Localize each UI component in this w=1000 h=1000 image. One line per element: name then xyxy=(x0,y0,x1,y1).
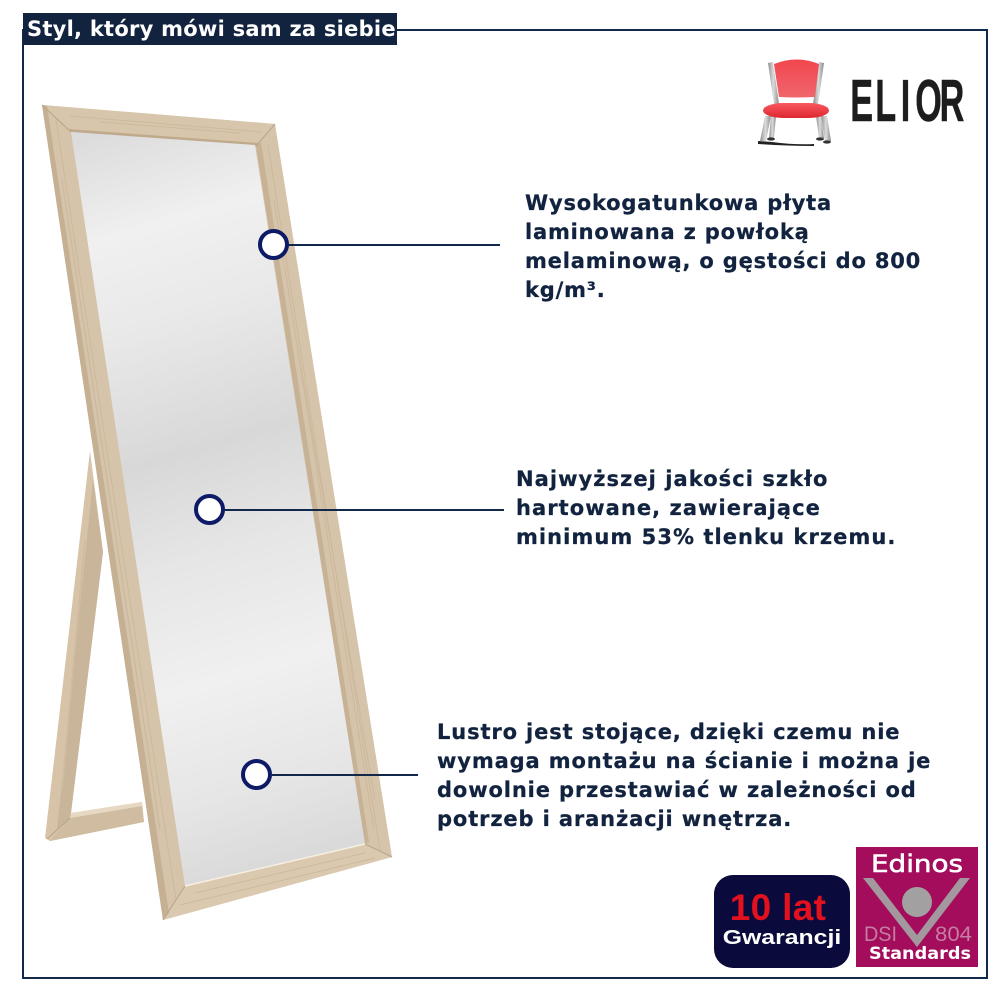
callout text 3 xyxy=(437,720,931,831)
logo wordmark: E xyxy=(850,68,873,134)
callout text 1: melaminową, o gęstości do 800 xyxy=(525,249,921,273)
DSI label: DSI xyxy=(864,923,897,946)
logo wordmark: I xyxy=(901,68,910,134)
badge caption: Gwarancji xyxy=(723,927,841,949)
logo wordmark: L xyxy=(875,68,896,134)
stand leg xyxy=(45,451,144,841)
logo wordmark xyxy=(850,68,964,134)
title: Styl, który mówi sam za siebie xyxy=(27,17,396,41)
callout marker 3 xyxy=(241,759,272,790)
callout text 3: Lustro jest stojące, dzięki czemu nie xyxy=(437,720,900,744)
badge heading: 10 lat xyxy=(730,887,826,928)
callout text 1: laminowana z powłoką xyxy=(525,220,810,244)
callout text 3: dowolnie przestawiać w zależności od xyxy=(437,778,917,802)
callout text 3: potrzeb i aranżacji wnętrza. xyxy=(437,807,792,831)
Standards label: Standards xyxy=(869,944,971,964)
frame shading xyxy=(42,105,169,920)
callout line 2 xyxy=(224,509,504,511)
callout marker 2 xyxy=(194,494,225,525)
logo: Elior xyxy=(758,60,964,146)
callout text 1: kg/m³. xyxy=(525,278,606,302)
callout text 1 xyxy=(525,191,921,302)
804 label: 804 xyxy=(935,923,972,946)
grey circle xyxy=(902,887,932,917)
mirror frame xyxy=(42,105,392,920)
callout text 3: wymaga montażu na ścianie i można je xyxy=(437,749,931,773)
V mark xyxy=(863,878,970,947)
callout text 2: hartowane, zawierające xyxy=(516,496,821,520)
callout text 1: Wysokogatunkowa płyta xyxy=(525,191,832,215)
callout line 3 xyxy=(272,774,418,776)
callout text 2 xyxy=(516,467,896,549)
logo wordmark: O xyxy=(915,68,942,134)
badge: 10 lat gwarancji xyxy=(714,875,850,968)
wood grain xyxy=(56,116,380,905)
logo wordmark: R xyxy=(940,68,964,134)
callout line 1 xyxy=(288,244,500,246)
badge: Edinos standards xyxy=(856,847,978,967)
callout marker 1 xyxy=(258,229,289,260)
callout text 2: Najwyższej jakości szkło xyxy=(516,467,828,491)
icon: red chair xyxy=(758,60,831,146)
callout text 2: minimum 53% tlenku krzemu. xyxy=(516,525,896,549)
Edinos label: Edinos xyxy=(871,850,963,878)
mirror glass xyxy=(71,132,365,886)
